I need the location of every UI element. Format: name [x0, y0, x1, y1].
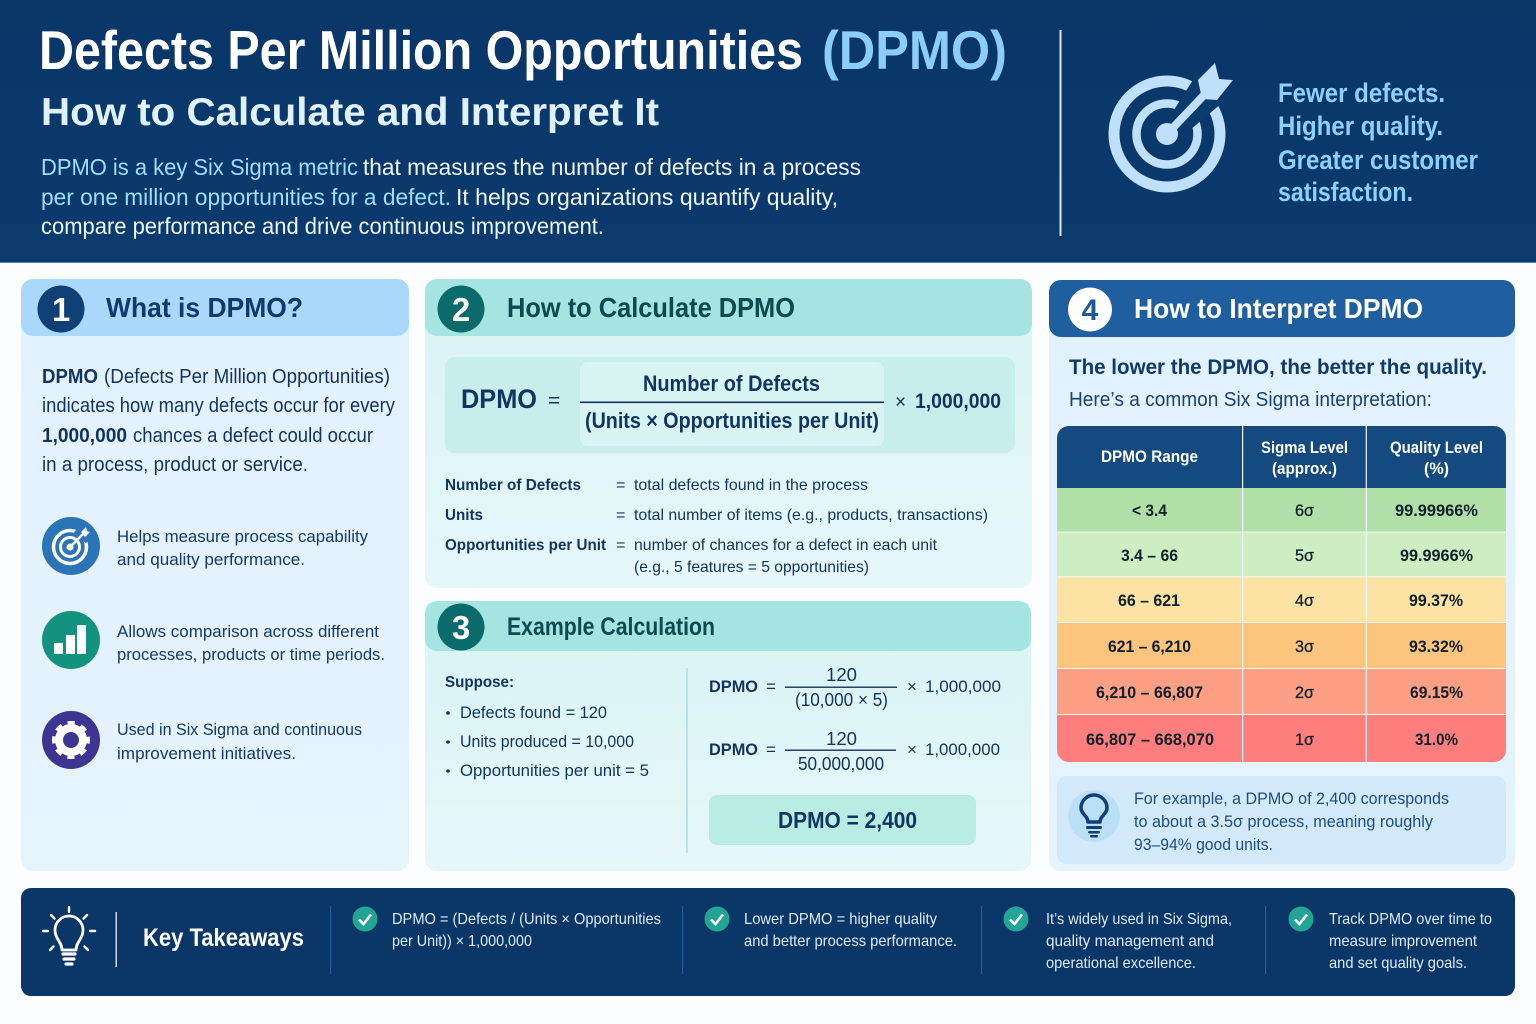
takeaway 2: Lower DPMO = higher quality	[744, 911, 937, 928]
formula box: ×	[895, 392, 906, 413]
variable definitions: =	[616, 537, 625, 554]
icon: bar chart	[42, 611, 100, 669]
intro paragraph: It helps organizations quantify quality,	[456, 184, 838, 210]
definition text: chances a defect could occur	[133, 425, 373, 447]
tagline: Greater customer	[1278, 145, 1478, 175]
definition text: in a process, product or service.	[42, 454, 308, 476]
table header row: DPMO Range	[1101, 448, 1198, 466]
panel 3 heading	[425, 601, 1031, 651]
benefit: capability: Helps measure process capability	[117, 527, 368, 546]
intro paragraph: DPMO is a key Six Sigma metric	[41, 154, 358, 180]
result box	[709, 795, 976, 845]
subtitle: How to Calculate and Interpret It	[41, 91, 659, 134]
table rows: 3σ	[1295, 638, 1314, 656]
panel 3: example calculation	[425, 601, 1031, 871]
panel 2: how to calculate	[425, 279, 1032, 588]
panel 4 heading	[1049, 280, 1515, 337]
calculation step 2: DPMO	[709, 740, 758, 759]
definition text: (Defects Per Million Opportunities)	[104, 366, 390, 388]
sigma table	[1057, 426, 1506, 762]
calculation step 1	[709, 665, 1001, 710]
takeaway 4: Track DPMO over time to	[1329, 911, 1492, 928]
calculation step 1: 1,000,000	[925, 677, 1001, 696]
tagline: Higher quality.	[1278, 111, 1443, 141]
takeaway 3	[1004, 906, 1232, 972]
takeaway 2: and better process performance.	[744, 933, 957, 950]
calculation step 2: 120	[826, 729, 857, 749]
formula box: (Units × Opportunities per Unit)	[585, 408, 879, 433]
title: Defects Per Million Opportunities	[39, 19, 803, 81]
panel 4: how to interpret	[1049, 280, 1515, 871]
table header row: Sigma Level	[1261, 439, 1348, 457]
takeaway 1: per Unit)) × 1,000,000	[392, 933, 532, 950]
takeaway 3: quality management and	[1046, 933, 1214, 950]
table rows: 69.15%	[1410, 684, 1463, 702]
icon: gear	[42, 711, 100, 769]
table rows: 99.9966%	[1400, 547, 1473, 565]
intro paragraph	[41, 154, 861, 239]
icon: small target	[42, 517, 100, 575]
callout text: to about a 3.5σ process, meaning roughly	[1134, 812, 1433, 831]
formula box: DPMO	[461, 384, 537, 414]
tagline	[1278, 78, 1478, 207]
table header row: (approx.)	[1272, 460, 1337, 478]
table rows: 1σ	[1295, 731, 1314, 749]
benefit: capability	[117, 527, 368, 569]
intro paragraph: compare performance and drive continuous improvement.	[41, 213, 604, 239]
given values: Defects found = 120	[460, 703, 607, 722]
calculation step 1: =	[766, 677, 776, 696]
table rows: 99.37%	[1409, 592, 1463, 610]
benefit: comparison: Allows comparison across different	[117, 622, 379, 641]
table header row: (%)	[1424, 460, 1449, 478]
given values: Opportunities per unit = 5	[460, 761, 649, 780]
variable definitions: total defects found in the process	[634, 477, 868, 494]
formula box	[445, 357, 1015, 453]
key takeaways bar	[21, 888, 1515, 996]
variable definitions: Units	[445, 507, 483, 524]
calculation step 1: DPMO	[709, 677, 758, 696]
calculation step 2: ×	[907, 740, 917, 759]
takeaway 4: and set quality goals.	[1329, 955, 1467, 972]
table rows	[1086, 502, 1478, 749]
calculation step 2: 1,000,000	[925, 740, 1000, 759]
variable definitions: =	[616, 507, 625, 524]
takeaway 4	[1288, 906, 1492, 972]
table rows: < 3.4	[1132, 502, 1168, 520]
tagline: Fewer defects.	[1278, 78, 1445, 108]
interpretation intro	[1069, 355, 1487, 411]
table rows: 621 – 6,210	[1108, 638, 1191, 656]
calculation step 2: =	[766, 740, 776, 759]
takeaway 4: measure improvement	[1329, 933, 1478, 950]
benefit: comparison	[117, 622, 385, 664]
variable definitions: Number of Defects	[445, 477, 581, 494]
interpretation intro: The lower the DPMO, the better the quality.	[1069, 355, 1487, 379]
takeaways heading: Key Takeaways	[143, 924, 304, 952]
takeaway 3: It’s widely used in Six Sigma,	[1046, 911, 1232, 928]
benefit: capability: and quality performance.	[117, 550, 305, 569]
calculation step 2	[709, 729, 1000, 774]
panel 2 heading: 2	[452, 291, 470, 328]
benefit: six sigma	[117, 720, 362, 763]
callout text: 93–94% good units.	[1134, 835, 1273, 854]
table rows: 66 – 621	[1118, 592, 1180, 610]
takeaway 1: DPMO = (Defects / (Units × Opportunities	[392, 911, 661, 928]
table header row: Quality Level	[1390, 439, 1483, 457]
tagline: satisfaction.	[1278, 177, 1413, 207]
panel 1 heading: What is DPMO?	[106, 292, 303, 323]
icon: target with arrow	[1114, 63, 1233, 187]
icon: lightbulb	[1068, 790, 1120, 842]
result box: DPMO = 2,400	[778, 807, 917, 833]
definition text: DPMO	[42, 366, 98, 388]
panel 1 heading: 1	[52, 291, 70, 328]
panel 2 heading: How to Calculate DPMO	[507, 292, 795, 323]
formula box: =	[548, 390, 560, 412]
table rows: 6,210 – 66,807	[1096, 684, 1203, 702]
takeaway 3: operational excellence.	[1046, 955, 1196, 972]
panel 4 heading: How to Interpret DPMO	[1134, 293, 1423, 324]
table rows: 6σ	[1295, 502, 1314, 520]
definition text: 1,000,000	[42, 425, 127, 447]
table rows: 2σ	[1295, 684, 1314, 702]
benefit: comparison: processes, products or time periods.	[117, 645, 385, 664]
panel 1: what is DPMO	[21, 279, 409, 871]
given values	[445, 674, 649, 780]
table rows: 4σ	[1295, 592, 1314, 610]
given values: Suppose:	[445, 674, 514, 691]
header banner	[0, 0, 1536, 263]
calculation step 1: (10,000 × 5)	[795, 690, 888, 710]
panel 3 heading: 3	[452, 609, 470, 646]
icon: lightbulb outline	[43, 907, 95, 964]
callout text: For example, a DPMO of 2,400 corresponds	[1134, 789, 1449, 808]
variable definitions: Opportunities per Unit	[445, 537, 607, 554]
interpretation intro: Here’s a common Six Sigma interpretation:	[1069, 389, 1432, 411]
example callout	[1057, 776, 1506, 864]
calculation step 1: 120	[826, 665, 857, 685]
benefit: six sigma: Used in Six Sigma and continuous	[117, 720, 362, 739]
table rows: 99.99966%	[1395, 502, 1478, 520]
intro paragraph: per one million opportunities for a defect.	[41, 184, 451, 210]
benefit: six sigma: improvement initiatives.	[117, 744, 296, 763]
title: (DPMO)	[822, 19, 1007, 81]
formula box: 1,000,000	[915, 390, 1001, 413]
callout text	[1134, 789, 1449, 854]
panel 2 heading	[425, 279, 1032, 336]
takeaway 2	[704, 906, 957, 950]
table header row	[1101, 439, 1483, 478]
table rows: 31.0%	[1415, 731, 1458, 749]
takeaway 1	[352, 906, 661, 950]
intro paragraph: that measures the number of defects in a process	[363, 154, 861, 180]
variable definitions: =	[616, 477, 625, 494]
variable definitions	[445, 477, 988, 576]
table rows: 5σ	[1295, 547, 1314, 565]
panel 3 heading: Example Calculation	[507, 613, 715, 641]
variable definitions: total number of items (e.g., products, transactions)	[634, 507, 988, 524]
variable definitions: (e.g., 5 features = 5 opportunities)	[634, 559, 869, 576]
table rows: 66,807 – 668,070	[1086, 731, 1214, 749]
variable definitions: number of chances for a defect in each unit	[634, 537, 938, 554]
given values: Units produced = 10,000	[460, 732, 634, 751]
formula box: Number of Defects	[643, 371, 820, 396]
table rows: 93.32%	[1409, 638, 1463, 656]
calculation step 2: 50,000,000	[798, 754, 884, 774]
panel 4 heading: 4	[1082, 294, 1099, 327]
calculation step 1: ×	[907, 677, 917, 696]
definition text	[42, 366, 395, 476]
panel 1 heading	[21, 279, 409, 336]
definition text: indicates how many defects occur for every	[42, 395, 395, 417]
table rows: 3.4 – 66	[1121, 547, 1178, 565]
